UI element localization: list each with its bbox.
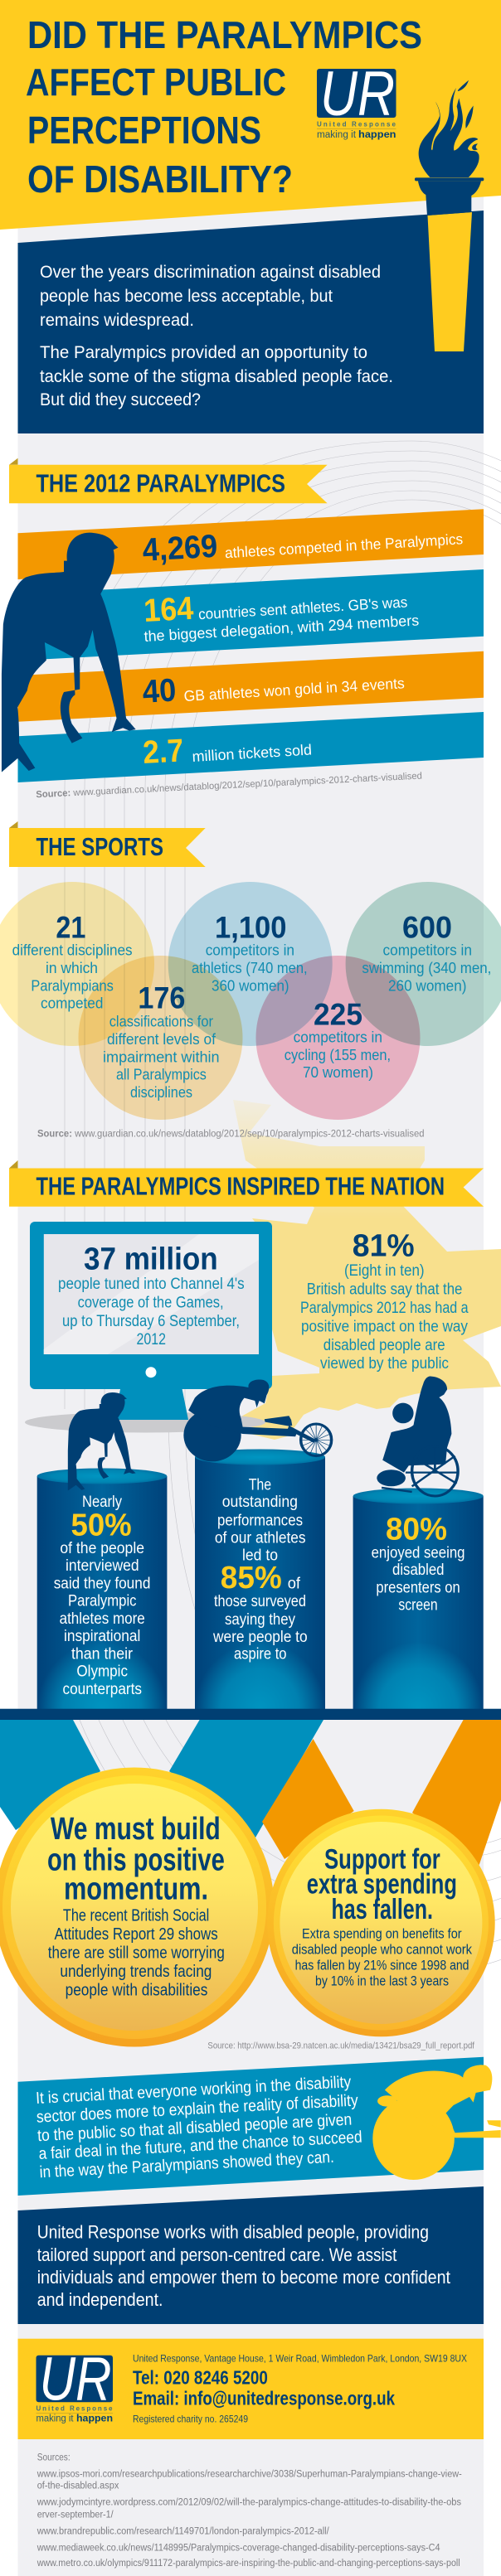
podium 2: saying they <box>225 1611 295 1629</box>
source: sports section: Source: www.guardian.co.uk/news/datablog/2012/sep/10/paralympics-2012-charts-visualised <box>37 1129 425 1139</box>
navy divider bar <box>0 1709 501 1720</box>
medal: positive momentum: underlying trends facing <box>60 1963 212 1981</box>
stat: 81%: positive impact on the way <box>301 1319 468 1336</box>
podium 1: said they found <box>54 1576 150 1593</box>
band: countries: the biggest delegation, with 294 members <box>143 612 420 645</box>
band: countries <box>18 569 484 661</box>
ribbon heading: The Sports <box>9 821 206 867</box>
medal: extra spending: Extra spending on benefits for <box>302 1925 462 1941</box>
stat: 37 million: people tuned into Channel 4's <box>58 1276 245 1293</box>
stat: 176 classifications: all Paralympics <box>116 1067 207 1083</box>
band: countries: countries sent athletes. GB's was <box>198 593 408 622</box>
sources list: www.brandrepublic.com/research/1149701/london-paralympics-2012-all/ <box>36 2526 329 2536</box>
blue call to action band: in the way the Paralympians showed they can. <box>39 2148 334 2181</box>
medal: extra spending: by 10% in the last 3 years <box>315 1973 449 1989</box>
blue call to action band: to the public so that all disabled people are given <box>37 2110 353 2145</box>
stat: 1,100 athletics <box>192 910 308 994</box>
stat: 1,100 athletics: athletics (740 men, <box>192 960 308 976</box>
medal: positive momentum <box>0 1767 274 2047</box>
stat: 600 swimming: 600 <box>402 910 452 945</box>
podium 2: 85% <box>221 1561 282 1595</box>
band: tickets: 2.7 <box>142 733 184 771</box>
medal: positive momentum: momentum. <box>64 1872 208 1907</box>
logo: United Response: UR <box>320 59 395 129</box>
logo: United Response footer: making it <box>36 2414 74 2423</box>
stat: 81%: 81% <box>353 1228 415 1263</box>
stat: 37 million <box>58 1242 245 1349</box>
band: tickets <box>18 712 484 782</box>
stat: 1,100 athletics: 1,100 <box>215 910 287 945</box>
podium 3: disabled <box>392 1562 445 1579</box>
stat: 1,100 athletics: 360 women) <box>212 977 289 994</box>
podium 1: than their <box>71 1646 134 1663</box>
stat: 176 classifications: classifications for <box>109 1013 213 1029</box>
stat: 81%: Paralympics 2012 has had a <box>300 1300 469 1317</box>
stat: 225 cycling: 225 <box>314 998 362 1032</box>
podium 3: 80% <box>386 1512 447 1547</box>
sources list: www.metro.co.uk/olympics/911172-paralympics-are-inspiring-the-public-and-changing-perceptions-says-poll <box>36 2559 460 2569</box>
podium 2: led to <box>242 1547 278 1565</box>
stat: 81%: viewed by the public <box>320 1355 449 1373</box>
sources list: www.jodymcintyre.wordpress.com/2012/09/02/will-the-paralympics-change-attitudes-to-disability-the-obs <box>36 2498 461 2508</box>
stat: 37 million: 2012 <box>136 1331 166 1349</box>
stat: 176 classifications <box>103 981 220 1101</box>
podium 3: enjoyed seeing <box>372 1544 465 1562</box>
podium 2: of <box>288 1576 301 1593</box>
stat: 81% <box>300 1228 469 1373</box>
podium 3: screen <box>398 1597 438 1615</box>
podium 2: of our athletes <box>215 1530 306 1547</box>
band: athletes: 4,269 <box>142 529 218 569</box>
medal ribbons <box>0 1720 501 1865</box>
contact details: Registered charity no. 265249 <box>133 2413 248 2424</box>
stat: 176 classifications: disciplines <box>130 1084 192 1101</box>
band: countries: 164 <box>143 591 195 629</box>
contact details <box>133 2352 467 2424</box>
stat: 176 classifications: impairment within <box>103 1049 220 1066</box>
podium 1: counterparts <box>63 1681 142 1698</box>
stat: 600 swimming: swimming (340 men, <box>362 960 491 976</box>
intro navy panel: But did they succeed? <box>40 390 201 409</box>
medal: positive momentum: We must build <box>51 1812 221 1847</box>
intro navy panel: tackle some of the stigma disabled people face. <box>40 367 393 386</box>
sources list <box>36 2453 462 2569</box>
podium 1 <box>37 1469 167 1709</box>
podium 2: The <box>249 1477 271 1494</box>
footer contact panel <box>18 2339 484 2439</box>
silhouette: sprinter <box>2 533 136 772</box>
stat: 37 million: up to Thursday 6 September, <box>62 1313 240 1330</box>
about United Response panel <box>18 2186 484 2324</box>
stat: 21 disciplines: competed <box>41 995 103 1012</box>
podium 1: Nearly <box>82 1494 122 1511</box>
band: athletes <box>18 509 484 579</box>
stat: 225 cycling: 70 women) <box>303 1064 373 1081</box>
ribbon heading: The 2012 Paralympics <box>9 458 328 503</box>
stat: 600 swimming: competitors in <box>383 942 472 959</box>
logo: United Response footer: happen <box>76 2414 113 2423</box>
podium 3 <box>353 1489 484 1709</box>
stat: 225 cycling: competitors in <box>294 1029 382 1046</box>
stat: 1,100 athletics: competitors in <box>206 942 294 959</box>
medal: extra spending <box>267 1809 495 2036</box>
blue call to action band: It is crucial that everyone working in the disability <box>36 2073 352 2108</box>
venn circles: sports <box>0 882 501 1120</box>
logo: United Response: United Response <box>317 121 396 128</box>
intro navy panel <box>18 211 484 433</box>
stat: 176 classifications: 176 <box>138 981 185 1015</box>
stat: 37 million: coverage of the Games, <box>78 1295 224 1312</box>
sources list: Sources: <box>37 2453 71 2462</box>
podium 1: Olympic <box>76 1663 128 1681</box>
title <box>26 13 422 201</box>
podium 1: of the people <box>60 1540 144 1557</box>
medal: positive momentum: The recent British Social <box>63 1906 209 1925</box>
ribbon heading: The Sports: THE SPORTS <box>36 832 163 861</box>
ribbon heading: The 2012 Paralympics: THE 2012 PARALYMPICS <box>36 469 285 497</box>
medal: extra spending: has fallen by 21% since 1998 and <box>295 1958 469 1973</box>
stat: 225 cycling <box>285 998 391 1081</box>
contact details: Tel: 020 8246 5200 <box>133 2367 268 2389</box>
silhouette: small sprinter on podium <box>68 1392 136 1491</box>
sources list: www.ipsos-mori.com/researchpublications/researcharchive/3038/Superhuman-Paralympians-change-view- <box>36 2469 462 2479</box>
intro navy panel: Over the years discrimination against disabled <box>40 263 381 282</box>
title: OF DISABILITY? <box>27 157 293 201</box>
medal: extra spending: has fallen. <box>332 1894 433 1925</box>
podium 1: Paralympic <box>68 1593 136 1610</box>
icon: torch <box>415 80 484 351</box>
podium 2: were people to <box>212 1629 308 1646</box>
about United Response panel: United Response works with disabled people, providing <box>37 2222 429 2243</box>
about United Response panel: individuals and empower them to become more confident <box>37 2267 450 2288</box>
stat: 81%: British adults say that the <box>307 1281 462 1299</box>
stat: 21 disciplines: in which <box>46 960 98 976</box>
podium 2: performances <box>217 1513 303 1530</box>
title: PERCEPTIONS <box>27 109 261 152</box>
blue call to action band: sector does more to explain the reality of disability <box>36 2091 358 2127</box>
logo: United Response: making it <box>317 130 357 140</box>
logo: United Response: happen <box>358 130 396 140</box>
logo: United Response footer: UR <box>40 2344 111 2414</box>
band: gold medals: 40 <box>142 672 177 710</box>
blue call to action band: a fair deal in the future, and the chance to succeed <box>38 2128 362 2163</box>
silhouette: yellow wheelchair racer <box>372 2065 501 2180</box>
podium 1: interviewed <box>66 1557 139 1575</box>
medal: positive momentum: there are still some worrying <box>48 1944 225 1963</box>
medal: extra spending: disabled people who cannot work <box>292 1941 472 1957</box>
stat: 600 swimming <box>362 910 491 994</box>
stat: 81%: (Eight in ten) <box>344 1262 425 1280</box>
decorative map of the UK <box>233 1100 501 1440</box>
stat: 21 disciplines: Paralympians <box>31 977 114 994</box>
logo: United Response footer: United Response <box>36 2404 113 2412</box>
medal: positive momentum: on this positive <box>47 1843 225 1878</box>
stat: 176 classifications: different levels of <box>107 1031 216 1048</box>
sources list: erver-september-1/ <box>37 2510 114 2520</box>
podium 3: presenters on <box>376 1580 460 1597</box>
podium 1: inspirational <box>64 1628 140 1645</box>
podium 2: those surveyed <box>214 1593 306 1610</box>
silhouette: wheelchair basketball player on podium <box>377 1377 458 1496</box>
title: DID THE PARALYMPICS <box>27 13 422 56</box>
band: tickets: million tickets sold <box>192 741 312 765</box>
silhouette: wheelchair racer on podium <box>183 1380 332 1461</box>
background: running track lines <box>65 441 501 1968</box>
icon: television monitor <box>25 1222 272 1432</box>
ribbon heading: The Paralympics inspired the nation <box>9 1160 484 1207</box>
about United Response panel: and independent. <box>37 2289 163 2310</box>
intro navy panel: people has become less acceptable, but <box>40 287 333 306</box>
header yellow background <box>0 0 501 230</box>
medal: positive momentum: Attitudes Report 29 shows <box>55 1925 218 1944</box>
stat: 225 cycling: cycling (155 men, <box>285 1047 391 1063</box>
stat: 21 disciplines: 21 <box>56 910 85 945</box>
sources list: of-the-disabled.aspx <box>37 2482 119 2491</box>
stat: 37 million: 37 million <box>84 1242 218 1276</box>
blue call to action band <box>18 2057 484 2196</box>
podium 2 <box>195 1449 325 1709</box>
podium 1: athletes more <box>60 1610 145 1628</box>
stat: 81%: disabled people are <box>323 1337 445 1354</box>
stat: 21 disciplines: different disciplines <box>12 942 133 959</box>
podium 2: aspire to <box>234 1646 287 1663</box>
sources list: www.mediaweek.co.uk/news/1148995/Paralympics-coverage-changed-disability-perceptions-says-C4 <box>36 2543 440 2553</box>
stat: 21 disciplines <box>12 910 133 1012</box>
podium 2: outstanding <box>222 1494 298 1511</box>
medal: extra spending: Support for <box>324 1843 440 1875</box>
band: gold medals <box>18 651 484 722</box>
podium 1: 50% <box>71 1508 132 1542</box>
title: AFFECT PUBLIC <box>26 61 286 104</box>
intro navy panel: remains widespread. <box>40 311 194 330</box>
medal: positive momentum: people with disabilities <box>66 1981 207 1999</box>
about United Response panel: tailored support and person-centred care. We assist <box>37 2244 396 2265</box>
band: athletes: athletes competed in the Paralympics <box>224 530 464 561</box>
panel: 2012 Paralympics stat bands <box>18 509 484 782</box>
band: gold medals: GB athletes won gold in 34 events <box>183 675 405 705</box>
source: 2012 section: Source: www.guardian.co.uk/news/datablog/2012/sep/10/paralympics-2012-charts-visualised <box>36 772 422 800</box>
contact details: Email: info@unitedresponse.org.uk <box>133 2388 395 2409</box>
intro navy panel: The Paralympics provided an opportunity to <box>40 343 367 362</box>
stat: 600 swimming: 260 women) <box>388 977 466 994</box>
